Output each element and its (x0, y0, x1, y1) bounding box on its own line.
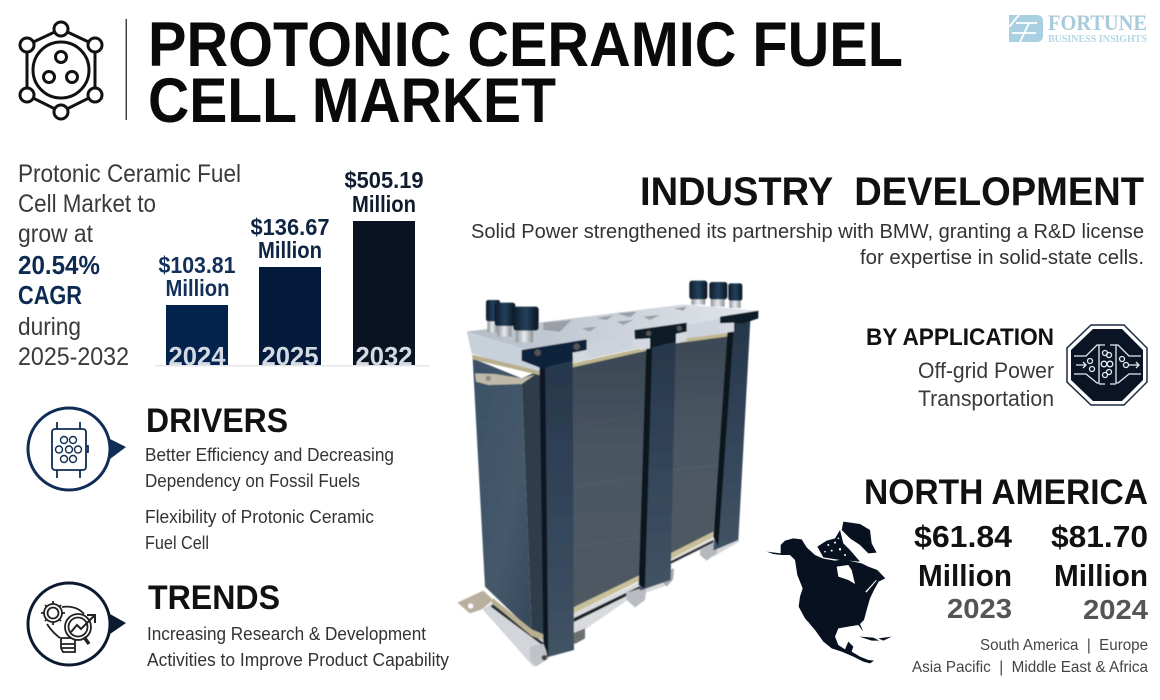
heading: by application: BY APPLICATION (866, 324, 1054, 351)
logo: Fortune Business Insights: FORTUNE (1048, 10, 1147, 35)
stat: north america 2023: Million (918, 558, 1012, 593)
text: applications: Transportation (918, 386, 1054, 411)
icon: trends (28, 583, 126, 665)
map: north america (767, 522, 892, 663)
text: drivers list: Better Efficiency and Decreasing (145, 445, 394, 465)
text: CAGR summary: grow at (18, 220, 93, 248)
clamps (522, 339, 587, 368)
bar 2032: $505.19 (344, 167, 424, 193)
text: other regions: South America | Europe (980, 637, 1148, 654)
text: drivers list: Dependency on Fossil Fuels (145, 471, 360, 491)
bar 2025: 2025 (262, 341, 318, 371)
logo: Fortune Business Insights: BUSINESS INSIGHTS (1048, 33, 1147, 45)
text: applications: Off-grid Power (918, 358, 1054, 383)
text: industry development (471, 221, 1144, 269)
stat: north america 2023: $61.84 (914, 519, 1013, 554)
bar 2024: Million (166, 275, 230, 301)
bar 2025: Million (258, 237, 322, 263)
text: drivers list (145, 445, 394, 553)
text: industry development: for expertise in solid-state cells. (860, 247, 1144, 269)
text: other regions (912, 637, 1148, 676)
heading: drivers: DRIVERS (146, 402, 288, 440)
text: CAGR summary (18, 160, 241, 371)
icon: application octagon (1067, 325, 1147, 405)
title: PROTONIC CERAMIC FUEL (148, 10, 903, 80)
logo: Fortune Business Insights (1009, 10, 1147, 45)
title (148, 10, 903, 136)
text: CAGR summary: CAGR (18, 280, 82, 310)
image: fuel cell stack (457, 281, 758, 667)
stat: north america 2023 (914, 519, 1013, 624)
text: trends list: Activities to Improve Product Capability (147, 650, 449, 670)
text: trends list (147, 624, 449, 670)
bar chart: market size (155, 167, 430, 371)
text: drivers list: Flexibility of Protonic Ceramic (145, 507, 374, 527)
text: applications (918, 358, 1054, 411)
front panels (572, 348, 647, 612)
icon: fuel cell molecule (20, 22, 102, 119)
stat: north america 2023: 2023 (947, 593, 1012, 624)
bar 2025: $136.67 (250, 214, 330, 240)
title: CELL MARKET (148, 66, 556, 136)
text: CAGR summary: 20.54% (18, 250, 100, 280)
bar 2025 (250, 214, 330, 371)
heading: north america: NORTH AMERICA (864, 473, 1148, 512)
bar 2032 (344, 167, 424, 371)
stat: north america 2024 (1051, 519, 1148, 625)
bar 2024: 2024 (168, 341, 226, 371)
bottom plates (457, 591, 493, 613)
heading: trends: TRENDS (148, 579, 280, 617)
straps (539, 347, 574, 657)
knobs (486, 281, 742, 342)
text: drivers list: Fuel Cell (145, 533, 209, 553)
stat: north america 2024: $81.70 (1051, 519, 1148, 554)
top plate (467, 304, 758, 353)
text: other regions: Asia Pacific | Middle East & Africa (912, 659, 1148, 676)
bar 2024: $103.81 (158, 252, 236, 278)
text: CAGR summary: 2025-2032 (18, 343, 129, 371)
text: CAGR summary: Protonic Ceramic Fuel (18, 160, 241, 188)
text: trends list: Increasing Research & Development (147, 624, 426, 644)
icon: drivers (28, 408, 126, 490)
stat: north america 2024: 2024 (1083, 594, 1148, 625)
bar 2032: Million (352, 191, 416, 217)
text: industry development: Solid Power strengthened its partnership with BMW, granting a R&D license (471, 221, 1144, 243)
text: CAGR summary: Cell Market to (18, 190, 156, 218)
bar 2032: 2032 (356, 341, 412, 371)
text: CAGR summary: during (18, 313, 81, 341)
stat: north america 2024: Million (1054, 558, 1148, 593)
bar 2024 (158, 252, 236, 371)
side face (473, 358, 532, 632)
heading: industry development: INDUSTRY DEVELOPMENT (640, 170, 1144, 214)
